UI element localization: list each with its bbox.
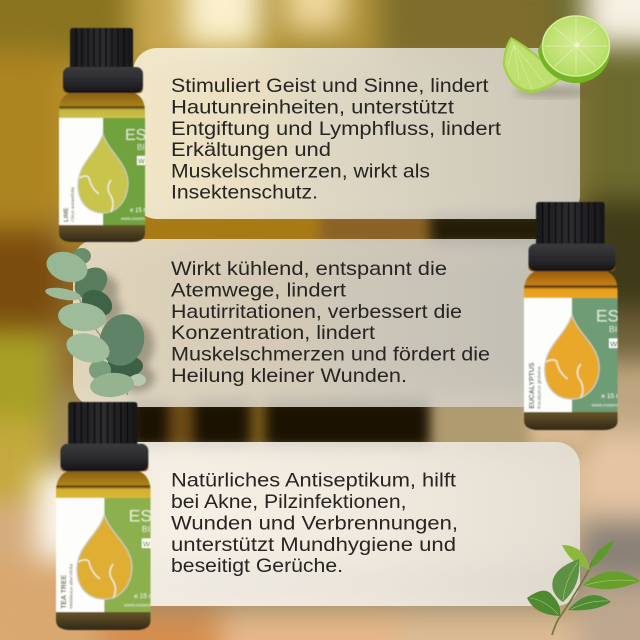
bottle: lime (59, 28, 157, 243)
bottle: tea tree: ESS (129, 506, 164, 525)
bottle: tea tree: TEA TREE (61, 575, 68, 609)
bottle: eucalyptus: Eucalyptus globulus (536, 366, 542, 409)
bottle: lime: Citrus aurantifolia (70, 186, 75, 222)
icon: tea leaves (527, 540, 640, 635)
text block: lime benefits (171, 75, 502, 204)
text block: lime benefits: Stimuliert Geist und Sinne, lindert (171, 75, 489, 97)
bottle: eucalyptus: ESS (596, 306, 631, 325)
icon: lime fruit (503, 15, 610, 97)
bottle: lime: e 15 ml (130, 208, 150, 214)
bottle: lime: BIO (137, 143, 151, 152)
text block: tea tree benefits: beseitigt Gerüche. (171, 555, 343, 577)
text block: eucalyptus benefits: Wirkt kühlend, entspannt die (171, 258, 447, 280)
text block: tea tree benefits: bei Akne, Pilzinfektionen, (171, 491, 406, 513)
text block: tea tree benefits: Wunden und Verbrennungen, (171, 512, 458, 534)
text block: lime benefits: Insektenschutz. (171, 182, 318, 204)
bottle: tea tree: BIO (142, 524, 157, 534)
bottle: eucalyptus: e 15 ml (601, 393, 623, 400)
text block: lime benefits: Muskelschmerzen, wirkt als (171, 160, 430, 182)
text block: tea tree benefits (171, 470, 458, 577)
panel: tea tree card (90, 442, 580, 606)
bottle: eucalyptus: EUCALYPTUS (529, 362, 536, 409)
bottle: tea tree: WI (143, 540, 152, 548)
bottle: tea tree: e 15 ml (134, 593, 156, 600)
panel: lime card (133, 48, 580, 219)
text block: lime benefits: Erkältungen und (171, 139, 331, 161)
text block: eucalyptus benefits: Muskelschmerzen und fördert die (171, 344, 490, 366)
text block: eucalyptus benefits: Konzentration, lindert (171, 322, 376, 344)
bottle: eucalyptus: WI (610, 340, 619, 348)
text block: tea tree benefits: unterstützt Mundhygiene und (171, 534, 456, 556)
text block: tea tree benefits: Natürliches Antiseptikum, hilft (171, 470, 457, 492)
bottle: tea tree: Melaleuca alternifolia (68, 564, 75, 609)
bottle: eucalyptus: BIO (609, 324, 624, 334)
text block: eucalyptus benefits (171, 258, 490, 387)
text block: eucalyptus benefits: Heilung kleiner Wunden. (171, 365, 407, 387)
icon: eucalyptus branch (43, 247, 155, 399)
bottle: lime: ESS (125, 127, 157, 144)
text block: eucalyptus benefits: Atemwege, lindert (171, 280, 347, 302)
bottle: lime: www.essenza (121, 216, 149, 221)
text block: lime benefits: Hautunreinheiten, unterstützt (171, 96, 455, 118)
bottle: lime: WI (138, 158, 147, 166)
text block: eucalyptus benefits: Hautirritationen, verbessert die (171, 301, 462, 323)
bottle: tea tree (55, 401, 152, 631)
bottle: eucalyptus (523, 201, 618, 431)
panel: eucalyptus card (73, 239, 563, 407)
text block: lime benefits: Entgiftung und Lymphfluss, lindert (171, 118, 502, 140)
bottle: tea tree: www.essenza (124, 604, 155, 609)
bottle: eucalyptus: www.essenza (592, 404, 622, 409)
blurred dark strips between cards (60, 212, 590, 448)
bottle: lime: LIME (64, 208, 70, 222)
